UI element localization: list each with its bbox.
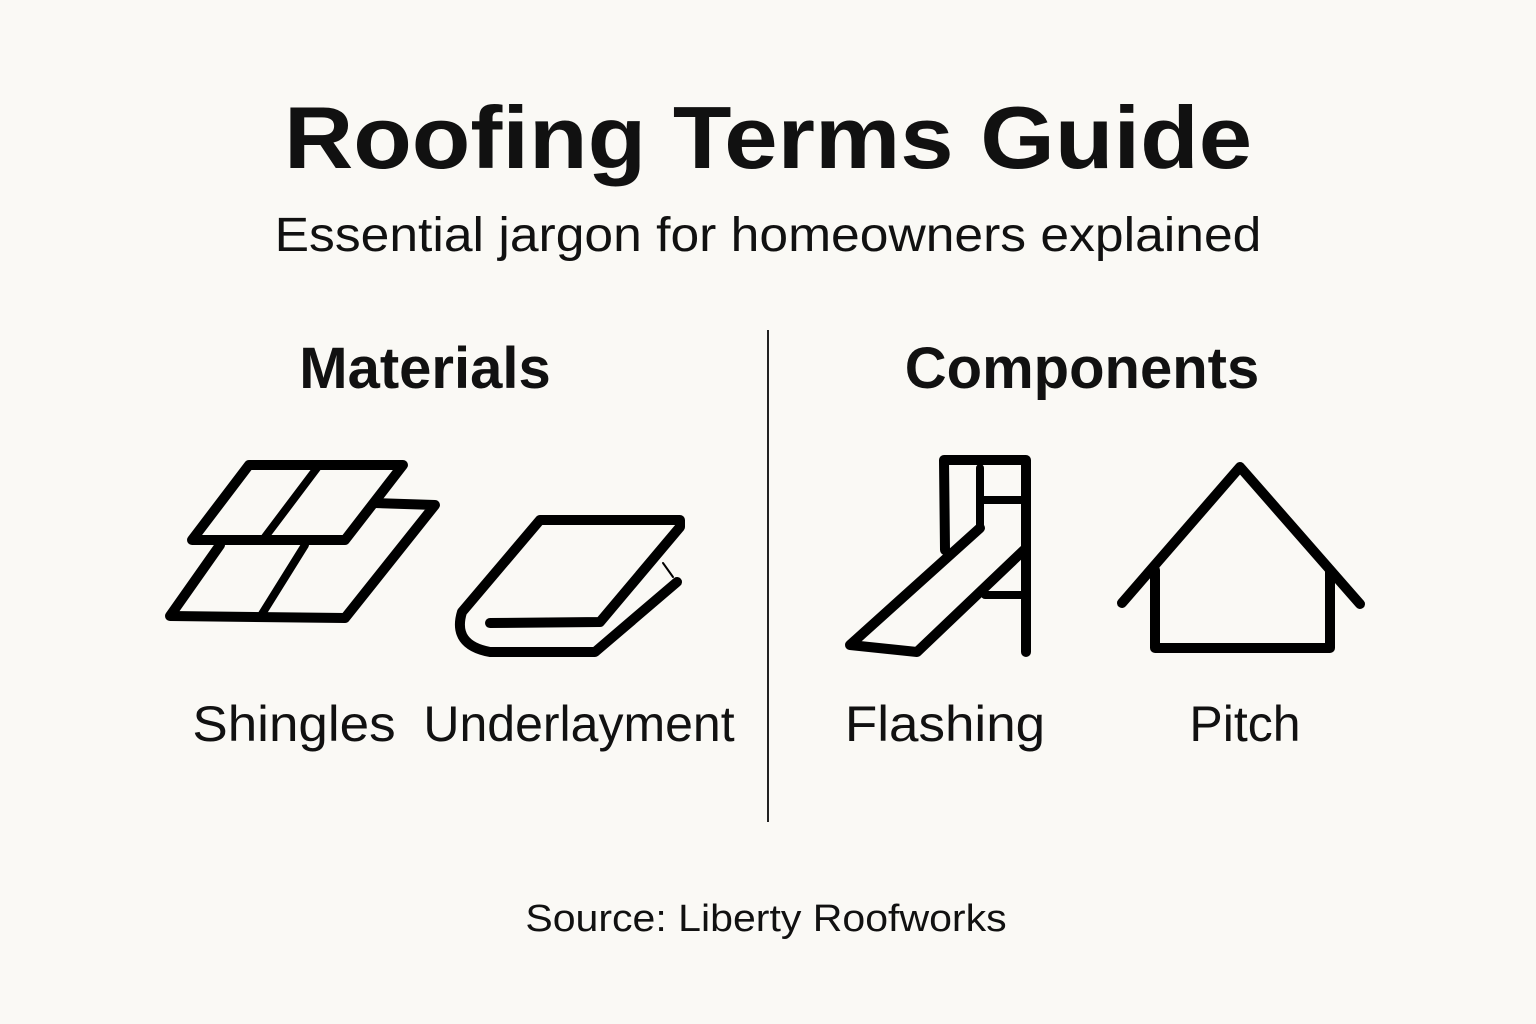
label: Pitch: Pitch	[1189, 696, 1301, 752]
icon: flashing	[850, 460, 1026, 652]
subtitle: Essential jargon for homeowners explained	[275, 209, 1261, 262]
title: Roofing Terms Guide	[284, 88, 1252, 187]
divider	[767, 330, 769, 822]
icon: pitch	[1122, 467, 1360, 648]
heading: Components: Components	[905, 336, 1259, 401]
label: Flashing: Flashing	[845, 696, 1045, 752]
icon: shingles	[170, 465, 435, 618]
icon: underlayment	[460, 520, 680, 652]
source: Source: Liberty Roofworks	[525, 898, 1007, 940]
label: Underlayment: Underlayment	[423, 696, 735, 752]
heading: Materials: Materials	[299, 336, 551, 401]
label: Shingles: Shingles	[192, 696, 396, 752]
